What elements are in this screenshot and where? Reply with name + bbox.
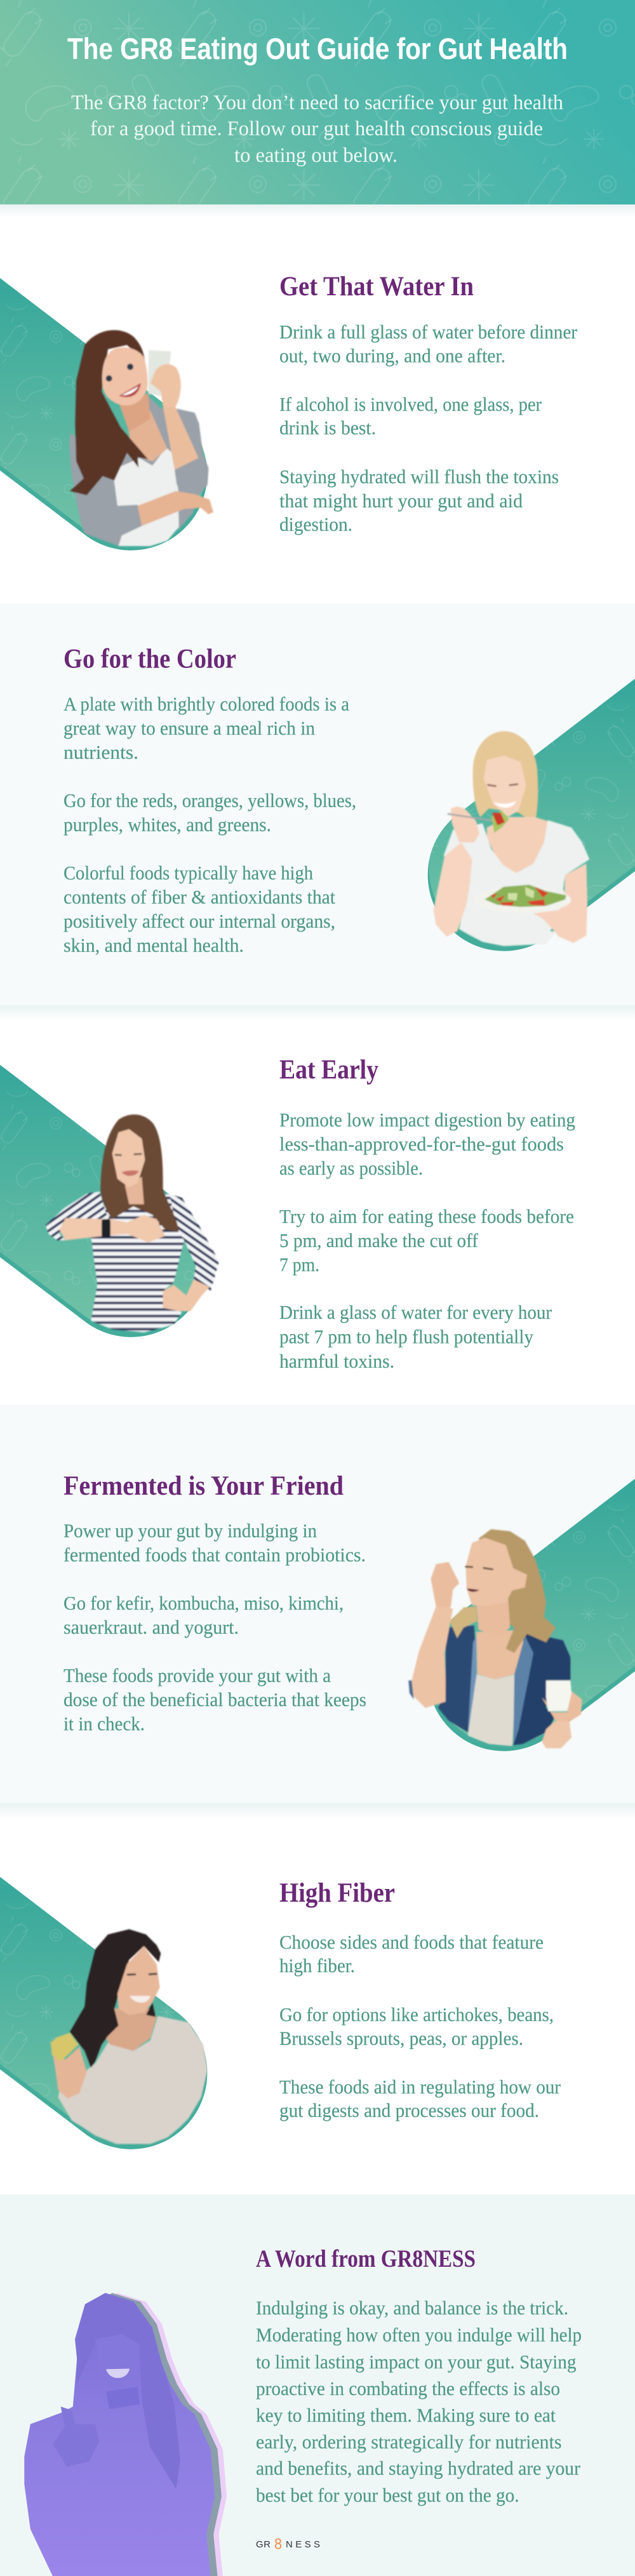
- body text: harmful toxins.: [279, 1350, 394, 1372]
- body text: Drink a full glass of water before dinner: [279, 321, 578, 343]
- heading: Get That Water In: [279, 272, 474, 302]
- body text: [64, 1519, 366, 1735]
- body text: Brussels sprouts, peas, or apples.: [279, 2027, 523, 2050]
- body text: Staying hydrated will flush the toxins: [279, 465, 559, 488]
- heading: A Word from GR8NESS: [256, 2245, 476, 2272]
- logo: GR8NESS: GR: [256, 2539, 271, 2550]
- intro text: for a good time. Follow our gut health conscious guide: [90, 117, 543, 140]
- body text: Indulging is okay, and balance is the trick.: [256, 2297, 568, 2319]
- teal band with microbes: [0, 1865, 207, 2149]
- body text: Moderating how often you indulge will help: [256, 2324, 582, 2346]
- body text: digestion.: [279, 513, 352, 535]
- body text: [64, 693, 356, 956]
- duotone photo: woman giving a thumbs up: [24, 2293, 227, 2576]
- heading: Fermented is Your Friend: [64, 1471, 344, 1501]
- body text: [279, 321, 578, 535]
- intro text: [71, 91, 563, 167]
- title: The GR8 Eating Out Guide for Gut Health: [67, 32, 568, 65]
- body text: as early as possible.: [279, 1157, 423, 1179]
- body text: great way to ensure a meal rich in: [64, 717, 315, 739]
- body text: nutrients.: [64, 741, 138, 763]
- body text: high fiber.: [279, 1954, 355, 1977]
- body text: early, ordering strategically for nutrients: [256, 2431, 561, 2453]
- body text: These foods provide your gut with a: [64, 1664, 331, 1686]
- heading: High Fiber: [279, 1878, 395, 1908]
- intro text: The GR8 factor? You don’t need to sacrifice your gut health: [71, 91, 563, 114]
- heading: Go for the Color: [64, 644, 236, 674]
- body text: Colorful foods typically have high: [64, 862, 313, 884]
- panel: a word from GR8NESS: [0, 2194, 635, 2576]
- header panel: [0, 0, 635, 217]
- body text: skin, and mental health.: [64, 934, 244, 956]
- panel: high fiber: [0, 1865, 561, 2149]
- body text: that might hurt your gut and aid: [279, 490, 523, 512]
- body text: A plate with brightly colored foods is a: [64, 693, 349, 715]
- body text: [279, 1109, 575, 1372]
- photo: woman tasting yogurt: [408, 1529, 582, 1748]
- photo: woman holding an apple: [51, 1929, 208, 2144]
- photo: woman holding a glass of water: [69, 330, 213, 546]
- body text: purples, whites, and greens.: [64, 813, 271, 836]
- panel: eat early: [0, 1053, 575, 1372]
- photo: woman checking her watch: [46, 1114, 219, 1332]
- body text: contents of fiber & antioxidants that: [64, 886, 335, 908]
- body text: it in check.: [64, 1712, 145, 1735]
- teal band with microbes: [0, 1053, 207, 1337]
- logo: GR8NESS: 8: [274, 2536, 282, 2553]
- photo: woman eating a salad: [434, 731, 589, 946]
- panel: fermented is your friend: [0, 1405, 635, 1819]
- body text: proactive in combating the effects is also: [256, 2377, 560, 2399]
- body text: dose of the beneficial bacteria that keeps: [64, 1688, 366, 1711]
- body text: Power up your gut by indulging in: [64, 1519, 317, 1542]
- body text: fermented foods that contain probiotics.: [64, 1544, 366, 1566]
- panel: get that water in: [0, 267, 578, 551]
- body text: Try to aim for eating these foods before: [279, 1205, 574, 1227]
- body text: These foods aid in regulating how our: [279, 2076, 561, 2098]
- body text: 7 pm.: [279, 1253, 319, 1276]
- teal band with microbes: [428, 667, 635, 951]
- body text: past 7 pm to help flush potentially: [279, 1326, 533, 1347]
- panel: go for the color: [0, 603, 635, 1020]
- body text: and benefits, and staying hydrated are your: [256, 2457, 581, 2479]
- intro text: to eating out below.: [234, 144, 398, 167]
- logo: GR8NESS: NESS: [286, 2539, 320, 2550]
- body text: sauerkraut. and yogurt.: [64, 1616, 239, 1638]
- body text: If alcohol is involved, one glass, per: [279, 393, 542, 415]
- heading: Eat Early: [279, 1055, 378, 1084]
- body text: positively affect our internal organs,: [64, 910, 335, 932]
- body text: drink is best.: [279, 417, 376, 439]
- body text: key to limiting them. Making sure to eat: [256, 2404, 556, 2426]
- body text: out, two during, and one after.: [279, 344, 505, 367]
- body text: 5 pm, and make the cut off: [279, 1229, 479, 1251]
- body text: Drink a glass of water for every hour: [279, 1301, 552, 1323]
- body text: Go for the reds, oranges, yellows, blues,: [64, 789, 356, 811]
- teal band with microbes: [428, 1467, 635, 1751]
- body text: Go for kefir, kombucha, miso, kimchi,: [64, 1592, 344, 1614]
- body text: best bet for your best gut on the go.: [256, 2484, 519, 2506]
- body text: Choose sides and foods that feature: [279, 1931, 544, 1953]
- body text: less-than-approved-for-the-gut foods: [279, 1133, 564, 1155]
- body text: gut digests and processes our food.: [279, 2099, 539, 2121]
- logo: GR8NESS: [256, 2536, 320, 2553]
- body text: to limit lasting impact on your gut. Staying: [256, 2351, 577, 2373]
- body text: Promote low impact digestion by eating: [279, 1109, 575, 1131]
- body text: Go for options like artichokes, beans,: [279, 2003, 554, 2025]
- body text: [279, 1931, 561, 2121]
- body text: [256, 2297, 582, 2506]
- teal band with microbes: [0, 267, 207, 551]
